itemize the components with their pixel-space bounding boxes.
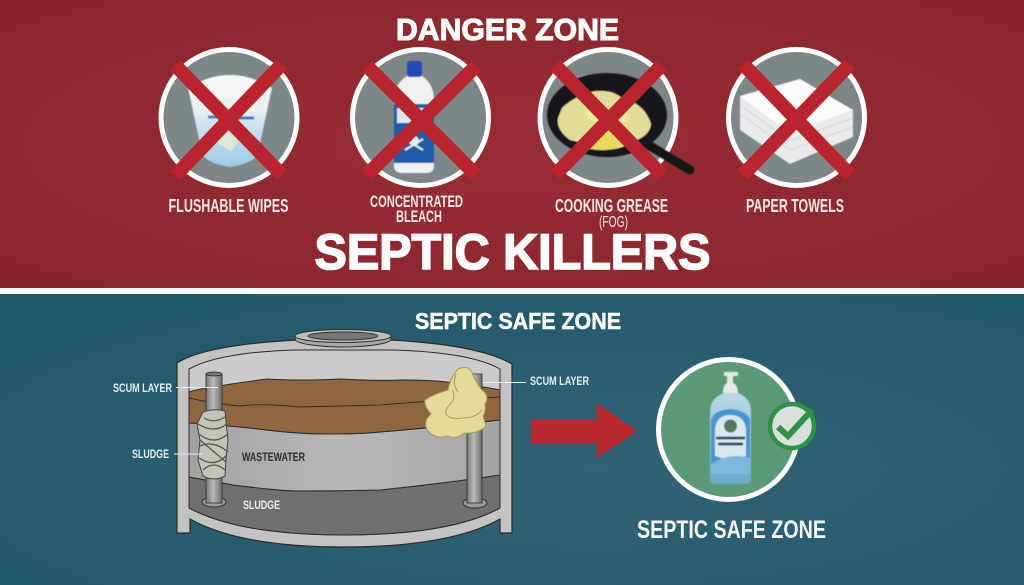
icon: cooking grease crossed out	[540, 50, 690, 186]
icon: flushable wipes crossed out	[161, 50, 297, 186]
icon: green check badge	[770, 404, 814, 448]
grease blob on right pipe	[425, 368, 487, 437]
icon: concentrated bleach crossed out	[352, 50, 488, 186]
label: concentrated bleach: BLEACH	[396, 207, 442, 226]
heading: danger zone: DANGER ZONE	[396, 12, 619, 47]
right pipe	[463, 374, 487, 508]
wipes wrapped around left pipe	[197, 410, 228, 479]
tank lid ring	[295, 330, 391, 347]
diagram: septic tank cross-section	[177, 330, 512, 547]
callout: left sludge: SLUDGE	[132, 447, 169, 461]
label: paper towels: PAPER TOWELS	[746, 196, 844, 216]
label: flushable wipes: FLUSHABLE WIPES	[168, 196, 288, 216]
scum layer	[189, 379, 500, 434]
tank label: bottom sludge: SLUDGE	[243, 498, 280, 512]
panel: septic safe zone	[0, 294, 1024, 585]
arrow: red pointing right	[531, 403, 637, 458]
panel: danger zone	[0, 0, 1024, 288]
tank label: wastewater: WASTEWATER	[242, 450, 305, 464]
label: septic safe zone: SEPTIC SAFE ZONE	[637, 516, 826, 544]
callout: right scum layer	[483, 374, 589, 388]
label: cooking grease: (FOG)	[599, 214, 628, 231]
left pipe	[202, 372, 226, 507]
heading: septic safe zone: SEPTIC SAFE ZONE	[415, 308, 621, 334]
sludge layer	[189, 475, 500, 535]
callout: right scum layer: SCUM LAYER	[530, 374, 589, 388]
wastewater layer	[189, 420, 500, 491]
label: cooking grease: COOKING GREASE	[555, 196, 668, 216]
callout: left scum layer: SCUM LAYER	[113, 381, 172, 395]
label: concentrated bleach: CONCENTRATED	[370, 192, 463, 211]
tank shell	[177, 340, 512, 547]
icon: safe soap bottle in green circle	[658, 360, 798, 500]
heading: septic killers: SEPTIC KILLERS	[314, 224, 710, 280]
icon: paper towels crossed out	[728, 50, 864, 186]
